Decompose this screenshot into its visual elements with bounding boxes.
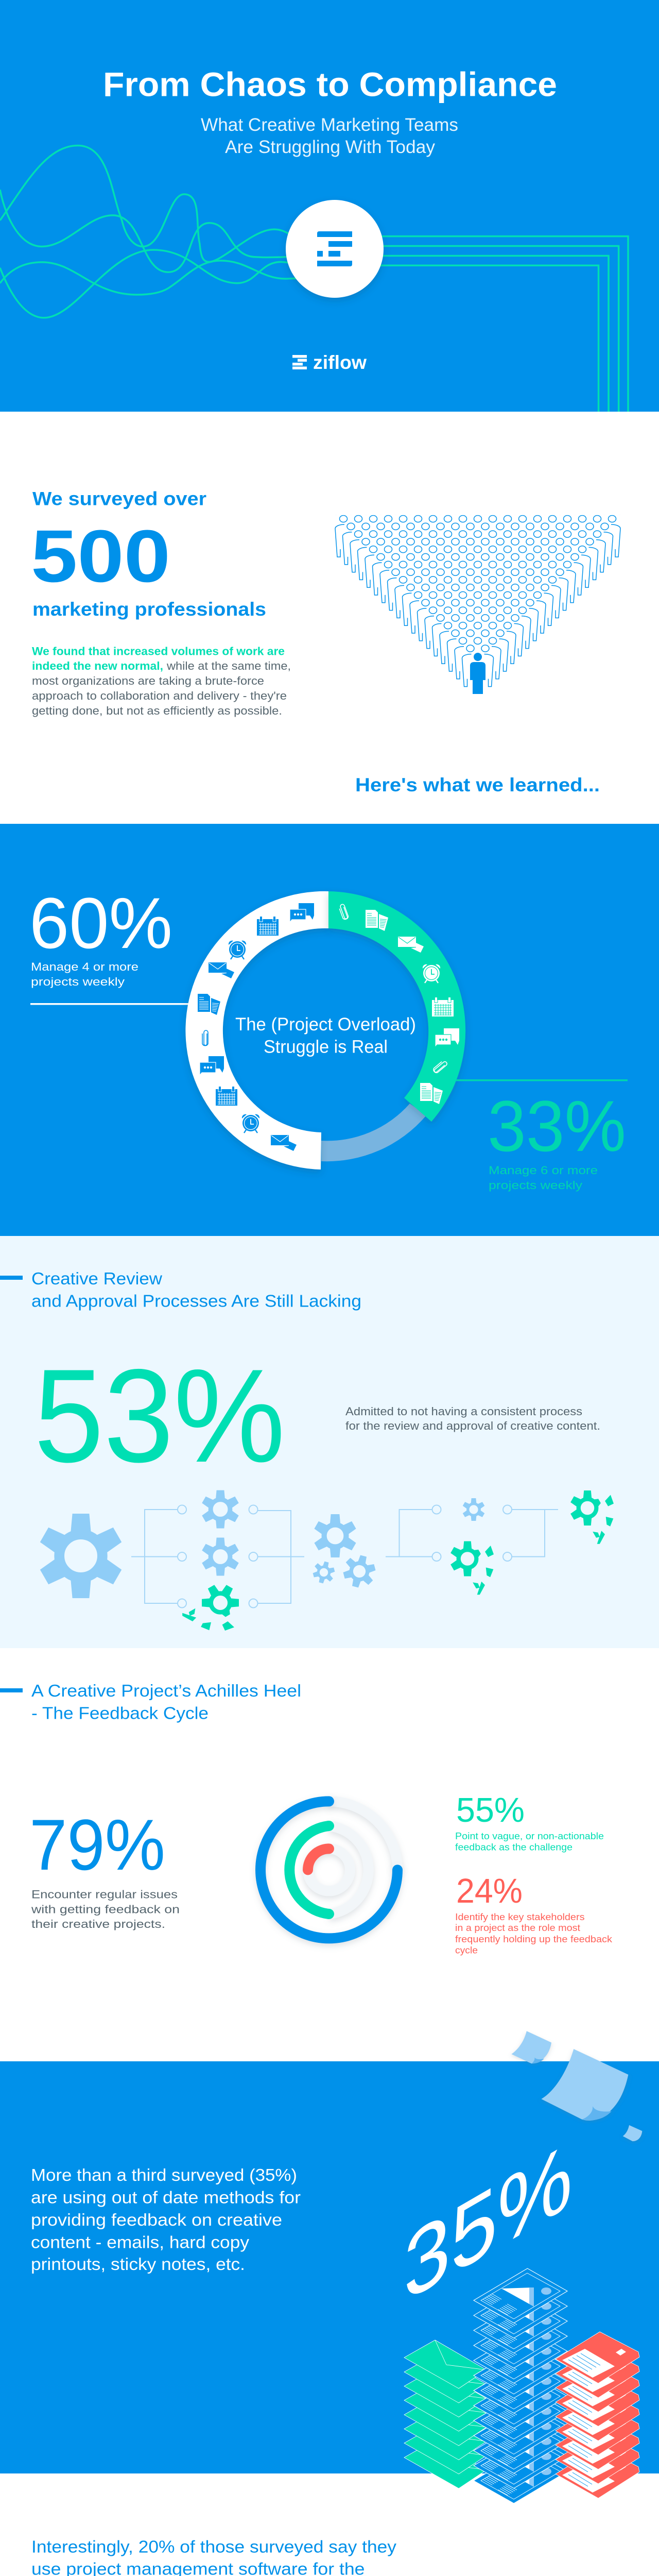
intro paragraph: indeed the new normal, [32,659,163,672]
heading: marketing professionals: marketing professionals [32,599,266,620]
stat 60 caption [31,960,138,988]
icons on green segment [338,904,459,1104]
section heading [31,1681,301,1722]
panel: feedback cycle [0,1681,613,1956]
section heading: and Approval Processes Are Still Lacking [31,1291,361,1311]
ring 33 percent segment [328,891,465,1122]
intro paragraph: while at the same time, [166,659,291,672]
stat 53 caption: Admitted to not having a consistent process [345,1405,582,1418]
stat 33 caption: Manage 6 or more [489,1164,598,1177]
crowd pyramid [334,515,621,694]
description text: More than a third surveyed (35%) [31,2165,297,2184]
stat 55 caption [455,1831,604,1853]
stat 24 caption: in a project as the role most [455,1923,580,1933]
heres what we learned: Here's what we learned... [355,774,600,795]
chaotic wave lines [0,146,299,318]
intro paragraph: getting done, but not as efficiently as possible. [32,704,282,717]
floppy disk stack [556,2332,639,2498]
panel: survey intro [31,488,621,795]
ring centre text [235,1014,416,1057]
stat 53 caption [345,1405,600,1432]
stat 79 caption [31,1888,180,1930]
blue statement: Interestingly, 20% of those surveyed say they [31,2537,397,2556]
overload ring [185,891,465,1170]
stat 79 caption: with getting feedback on [31,1903,180,1916]
stat 79 percent: 79% [29,1804,165,1885]
red ring arc [308,1849,329,1870]
skewed 35 percent: 35% [404,2121,573,2323]
ring tracks [308,1801,397,1914]
stat 55 caption: Point to vague, or non-actionable [455,1831,604,1841]
stat 55 percent: 55% [456,1791,525,1829]
ring remainder [321,1104,426,1161]
title: From Chaos to Compliance [103,65,557,103]
broken gears [182,1490,614,1631]
sticky notes [511,2031,642,2141]
panel: creative review [0,1236,659,1648]
ring centre text: The (Project Overload) [235,1014,416,1035]
description text [31,2165,301,2274]
section heading: Creative Review [31,1269,162,1288]
email stack [404,2340,487,2488]
orderly straight lines [376,236,628,412]
ziflow logo: ziflow [313,352,367,373]
subtitle: Are Struggling With Today [225,137,435,157]
concentric ring chart [261,1801,397,1938]
ring centre text: Struggle is Real [264,1037,388,1057]
big number 500: 500 [31,515,170,598]
subtitle [201,115,458,157]
stat 24 caption: Identify the key stakeholders [455,1912,585,1922]
stat 60 caption: Manage 4 or more [31,960,138,973]
description text: providing feedback on creative [31,2210,282,2229]
stat 53 caption: for the review and approval of creative content. [345,1419,600,1432]
blue statement [31,2537,397,2576]
intro paragraph [32,645,291,717]
process gears [39,1490,485,1598]
section heading: A Creative Project’s Achilles Heel [31,1681,301,1700]
panel: project overload [0,824,659,1236]
green leader line [456,1079,628,1081]
stat 60 caption: projects weekly [31,975,125,988]
stat 33 caption [489,1164,598,1192]
blue ring arc [261,1801,397,1938]
stat 60 percent: 60% [29,883,172,963]
printout stack [474,2268,567,2503]
subtitle: What Creative Marketing Teams [201,115,458,135]
white leader line [30,1003,191,1005]
logo circle [286,200,384,298]
icons on white segment [198,903,314,1151]
intro paragraph: We found that increased volumes of work are [32,645,285,657]
heading dash [0,1276,23,1280]
stat 24 caption: cycle [455,1945,478,1956]
process connector lines [131,1505,558,1607]
description text: content - emails, hard copy [31,2233,250,2252]
intro paragraph: most organizations are taking a brute-force [32,674,264,687]
description text: printouts, sticky notes, etc. [31,2255,245,2274]
description text: are using out of date methods for [31,2188,301,2207]
stat 79 caption: Encounter regular issues [31,1888,178,1901]
panel: hero [0,0,659,412]
stat 24 percent: 24% [456,1872,523,1910]
section heading: - The Feedback Cycle [31,1703,209,1722]
stat 33 caption: projects weekly [489,1179,582,1192]
intro paragraph: approach to collaboration and delivery - they're [32,689,287,702]
heading dash [0,1688,23,1692]
ring 60 percent segment [185,891,328,1170]
stat 33 percent: 33% [488,1086,626,1166]
stat 24 caption [455,1912,613,1956]
green ring arc [289,1826,329,1914]
section heading [31,1269,361,1311]
panel: email reliance [31,2537,625,2576]
panel: out of date methods [0,2031,659,2503]
stat 24 caption: frequently holding up the feedback [455,1934,613,1944]
stat 55 caption: feedback as the challenge [455,1842,573,1853]
heading: we surveyed over: We surveyed over [32,488,206,509]
stat 53 percent: 53% [34,1341,285,1490]
stat 79 caption: their creative projects. [31,1918,165,1930]
